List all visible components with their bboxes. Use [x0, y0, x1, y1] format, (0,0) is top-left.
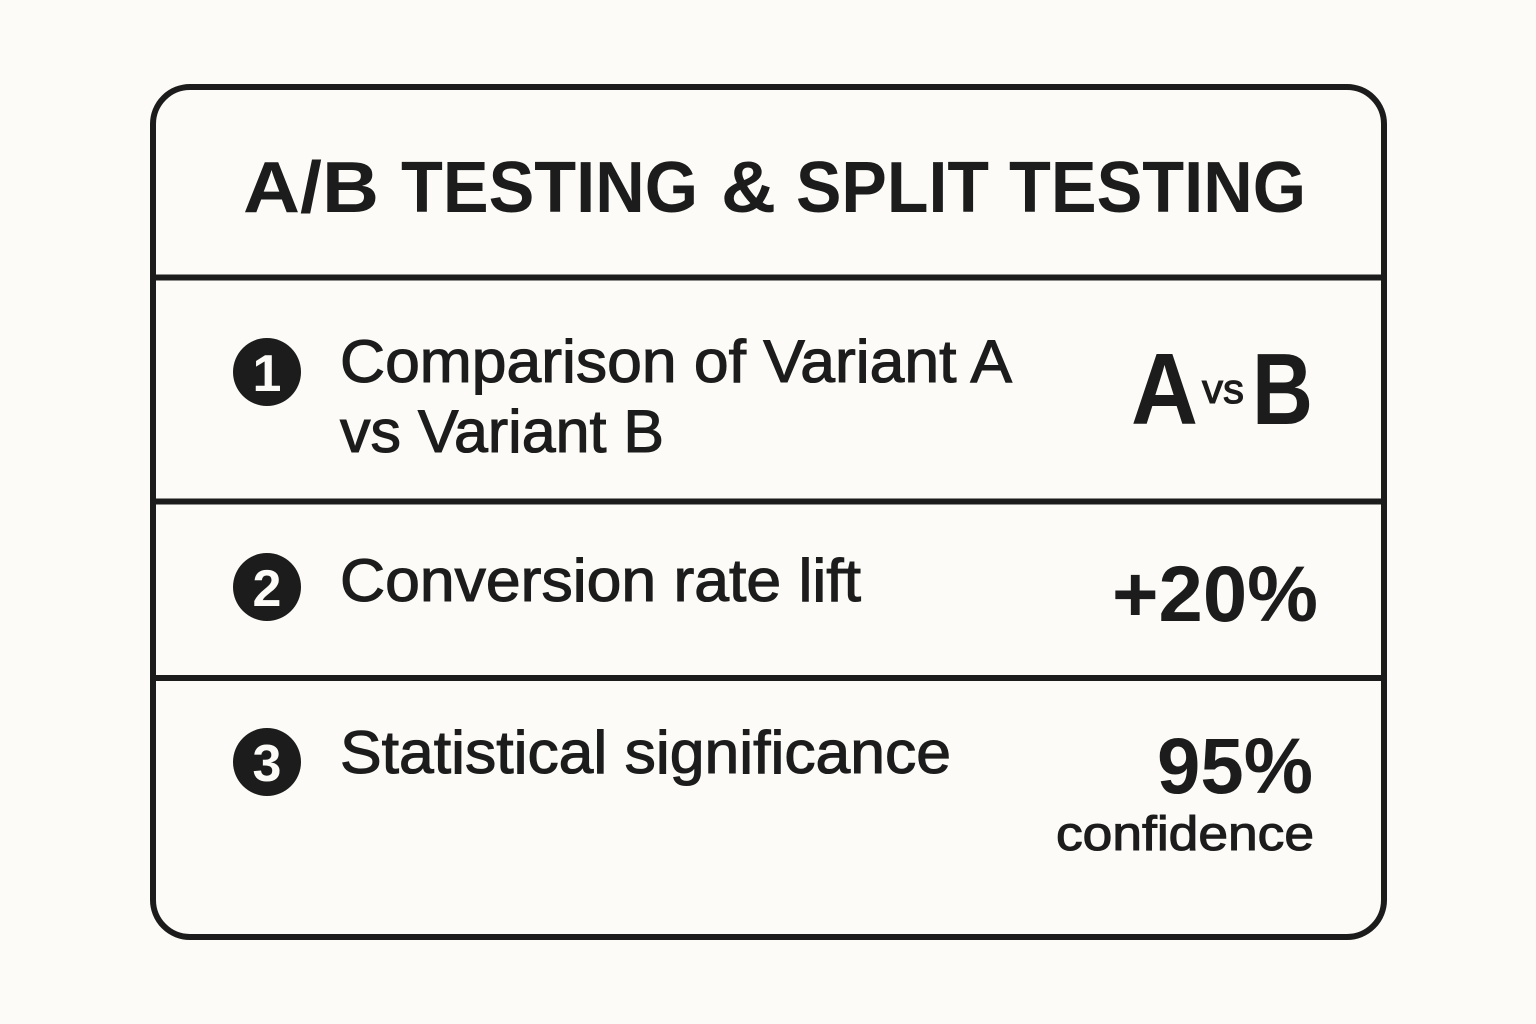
title: TESTING — [401, 148, 698, 228]
title: A/B — [243, 148, 379, 228]
metric: +20%: +20% — [1112, 549, 1318, 638]
metric: A vs B: A — [1131, 334, 1198, 446]
metric: A vs B: vs — [1202, 365, 1244, 412]
icon: number 2: 2 — [253, 560, 281, 618]
text: conversion rate lift: Conversion rate lift — [340, 547, 861, 614]
icon: number 3: 3 — [253, 735, 281, 793]
title — [243, 148, 1306, 228]
row 3 — [233, 719, 1314, 861]
text: comparison description: vs Variant B — [340, 398, 664, 465]
icon: number 1: 1 — [253, 345, 281, 403]
text: comparison description: Comparison of Variant A — [340, 328, 1012, 395]
panel: outer card — [153, 87, 1384, 937]
row 1 — [233, 328, 1313, 465]
metric: A vs B — [1131, 334, 1313, 446]
text: statistical significance: Statistical significance — [340, 719, 951, 786]
metric: A vs B: B — [1252, 334, 1313, 446]
icon: number 3 — [233, 728, 301, 796]
icon: number 2 — [233, 553, 301, 621]
metric: 95% confidence: confidence — [1056, 808, 1314, 861]
metric: 95% confidence: 95% — [1157, 721, 1313, 810]
icon: number 1 — [233, 338, 301, 406]
row 2 — [233, 547, 1318, 638]
title: SPLIT — [796, 148, 989, 228]
text: comparison description — [340, 328, 1012, 465]
title: TESTING — [1009, 148, 1306, 228]
metric: 95% confidence — [1056, 721, 1314, 861]
title: & — [721, 148, 776, 228]
